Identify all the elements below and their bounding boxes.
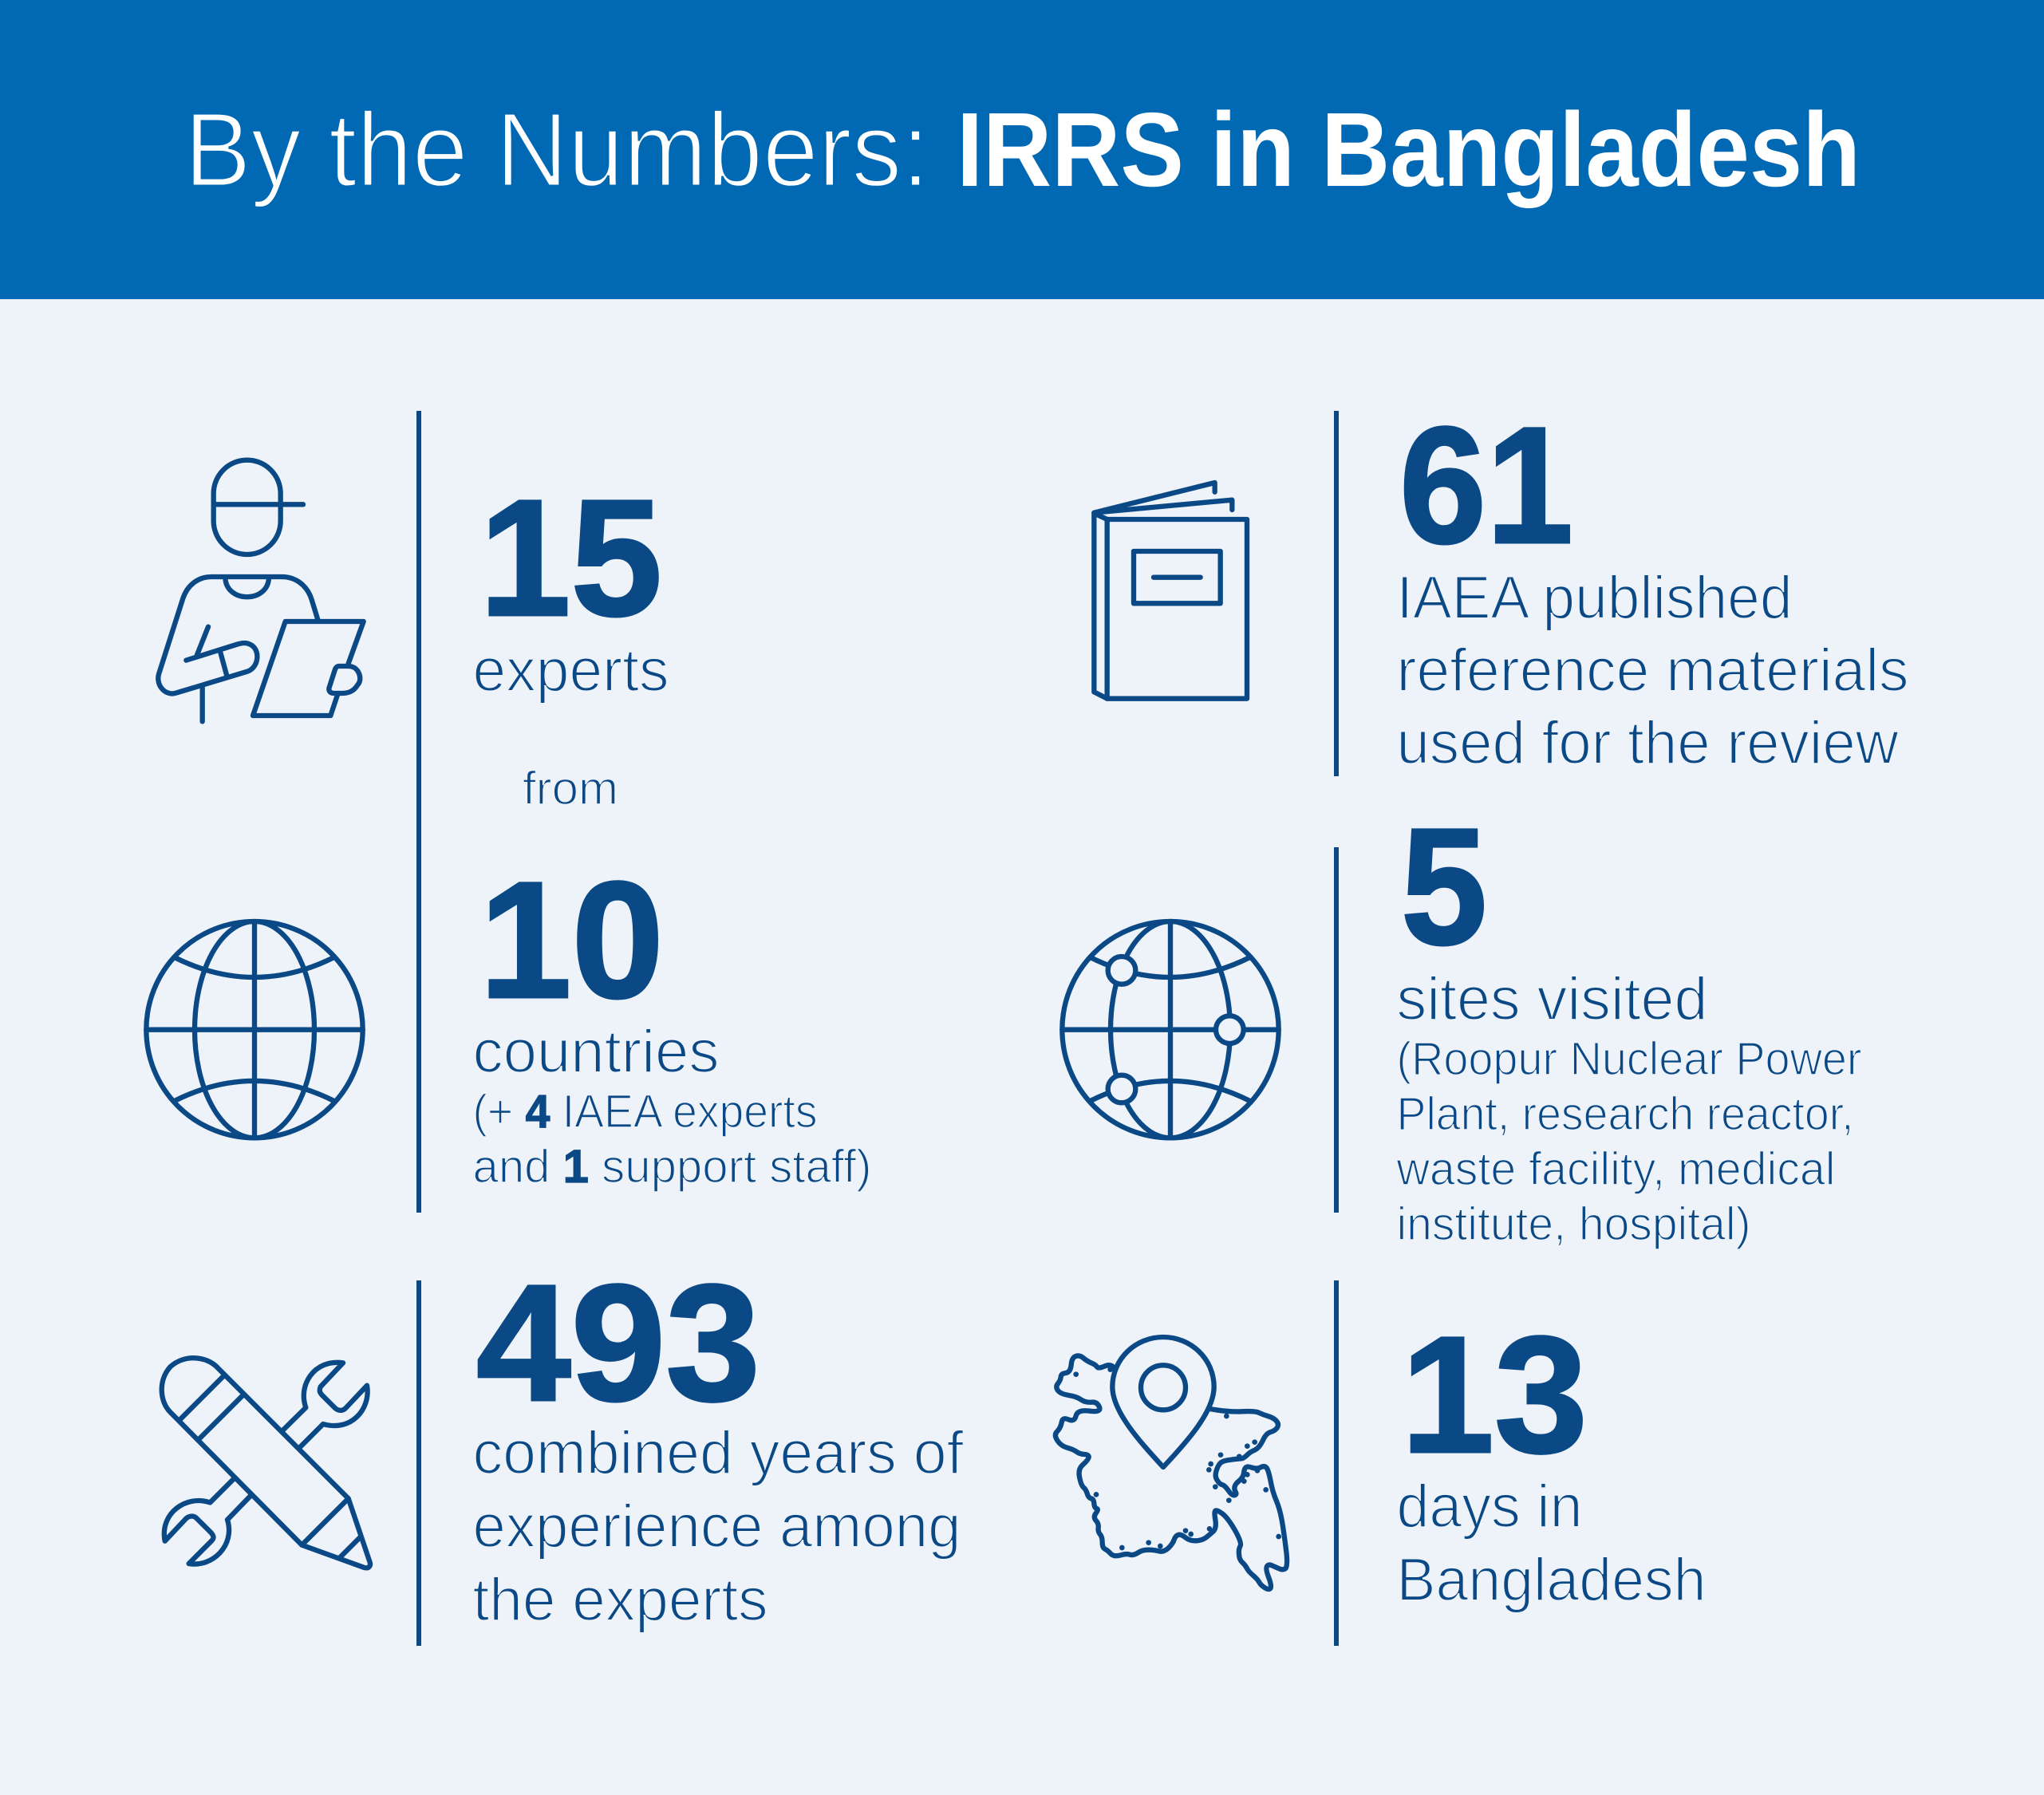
icon: globe with location markers [1062,921,1279,1138]
stat: 15 experts: 15 [479,466,662,651]
panel: combined years of experience [162,1251,964,1646]
stat: 493 years: 493 [476,1251,760,1436]
header band [0,0,2044,299]
panel: experts and countries [146,411,871,1213]
stat: 493 years: experience among [472,1493,961,1560]
stat: 5 sites: waste facility, medical [1396,1143,1835,1195]
panel: days in Bangladesh [1056,1280,1706,1646]
stat: 15 experts: experts [472,637,669,704]
stat: 13 days [1396,1303,1706,1614]
stat: 61 materials [1396,393,1908,777]
stat: 5 sites: sites visited [1396,965,1707,1033]
panel: sites visited [1062,795,1862,1250]
icon: book [1094,483,1247,699]
stat: 61 materials: used for the review [1396,709,1900,777]
stat: 10 countries: (+ 4 IAEA experts [472,1086,817,1138]
stat: 10 countries [472,848,871,1193]
stat: 10 countries: and 1 support staff) [472,1141,871,1193]
stat: 13 days: days in [1396,1473,1583,1541]
stat: 5 sites: Plant, research reactor, [1396,1088,1854,1140]
title [184,91,1861,208]
stat: 493 years [472,1251,964,1634]
icon: Bangladesh map with location pin [1056,1337,1287,1589]
icon: crossed pencil and wrench [162,1358,370,1568]
title: By the Numbers: [184,91,929,208]
stat: 13 days: Bangladesh [1396,1546,1706,1614]
stat: 5 sites: institute, hospital) [1396,1198,1750,1250]
icon: worker with clipboard [158,460,364,721]
title: IRRS in Bangladesh [957,91,1861,208]
stat: 13 days: 13 [1401,1303,1588,1488]
panel: reference materials [1094,393,1908,777]
connector text: from: from [523,763,618,815]
stat: 493 years: combined years of [472,1419,964,1487]
icon: globe [146,921,363,1138]
stat: 61 materials: reference materials [1396,637,1908,704]
stat: 61 materials: 61 [1399,393,1573,578]
stat: 5 sites: (Roopur Nuclear Power [1396,1033,1862,1085]
stat: 493 years: the experts [472,1566,767,1634]
stat: 10 countries: countries [472,1018,720,1086]
stat: 10 countries: 10 [479,848,664,1033]
stat: 61 materials: IAEA published [1396,564,1792,632]
stat: 5 sites: 5 [1401,795,1487,980]
stat: 5 sites [1396,795,1862,1250]
